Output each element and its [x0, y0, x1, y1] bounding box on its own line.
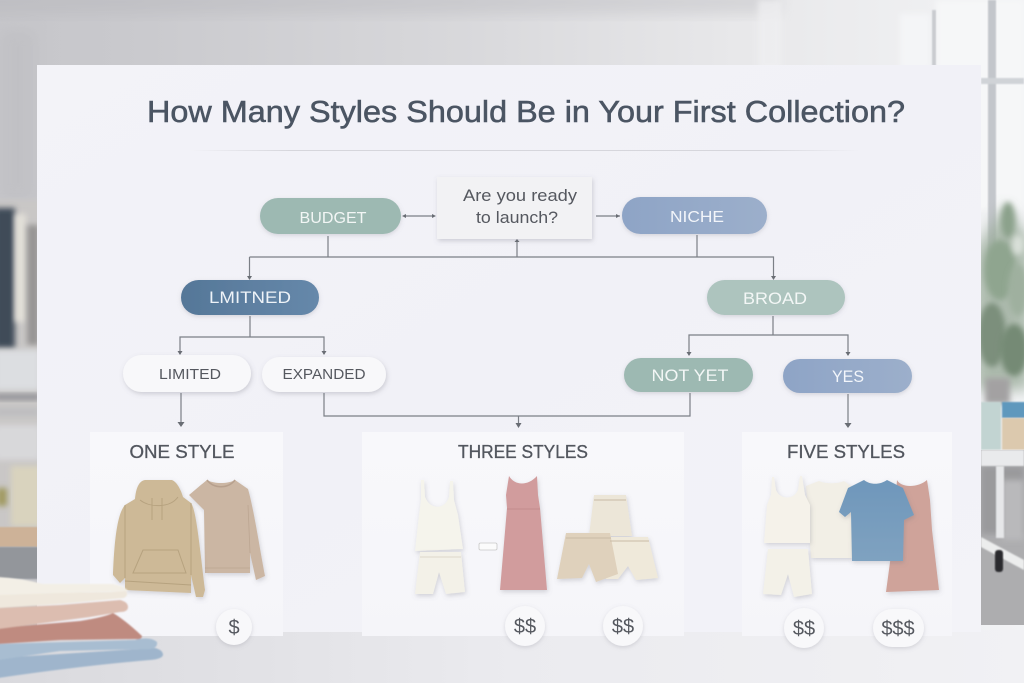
pill: NICHE: [622, 197, 767, 234]
panel: five styles: [742, 432, 952, 648]
garment: small white tag: [479, 543, 497, 550]
floor / table surface: [0, 630, 1024, 683]
title divider: [190, 150, 860, 151]
title: How Many Styles Should Be in Your First Collection?: [147, 94, 905, 129]
garment: white tank top: [415, 480, 463, 551]
pill: BROAD: BROAD: [743, 289, 807, 308]
flowchart connectors: [180, 216, 848, 425]
price badge: $$$: $$$: [881, 618, 915, 640]
decision box: Are you ready to launch?: to launch?: [476, 208, 558, 227]
pill: NICHE: NICHE: [670, 209, 724, 226]
garment: rose dress: [886, 480, 939, 592]
price badge: $$: $$: [793, 618, 815, 640]
garment: white shorts: [415, 552, 465, 594]
heading: one style: ONE STYLE: [130, 442, 234, 462]
pill: NOT YET: [624, 358, 753, 392]
pill: YES: YES: [832, 367, 864, 386]
pill: EXPANDED: [262, 357, 386, 392]
pill: EXPANDED: EXPANDED: [282, 366, 366, 383]
pill: LMITNED: LMITNED: [209, 288, 291, 307]
panel: three styles: [362, 432, 684, 646]
panel: one style: [90, 432, 283, 645]
pill: LIMITED: [123, 355, 251, 392]
garment: white shorts: [763, 549, 812, 597]
garment: cream tee: [806, 481, 852, 558]
garment: beige sweater: [189, 480, 265, 580]
pill: BUDGET: BUDGET: [300, 210, 367, 227]
price badge: $$: [505, 606, 545, 646]
price badge: $: $: [228, 617, 240, 639]
connector arrowheads: [178, 214, 852, 428]
price badge: $$: [784, 608, 824, 648]
garment: tan hoodie: [113, 480, 205, 597]
price badge: $: [216, 609, 252, 645]
garment: white tank top: [764, 476, 810, 543]
decision box: Are you ready to launch?: [437, 177, 592, 239]
price badge: $$: [603, 606, 643, 646]
presentation board: [37, 65, 981, 632]
pill: BUDGET: [260, 198, 401, 234]
pill: NOT YET: NOT YET: [652, 366, 728, 385]
decision box: Are you ready to launch?: Are you ready: [463, 186, 578, 205]
price badge: $$$: [873, 609, 924, 647]
garment: blue t-shirt: [839, 480, 914, 561]
price badge: $$: $$: [514, 616, 536, 638]
heading: five styles: FIVE STYLES: [787, 442, 905, 462]
garment: pink dress: [500, 476, 547, 590]
folded fabric stack: [0, 577, 163, 678]
garment: stacked beige shorts: [557, 495, 658, 582]
pill: YES: [783, 359, 912, 393]
pill: LIMITED: LIMITED: [159, 366, 221, 383]
price badge: $$: $$: [612, 616, 634, 638]
heading: three styles: THREE STYLES: [458, 442, 588, 462]
pill: LMITNED: [181, 280, 319, 315]
pill: BROAD: [707, 280, 845, 315]
